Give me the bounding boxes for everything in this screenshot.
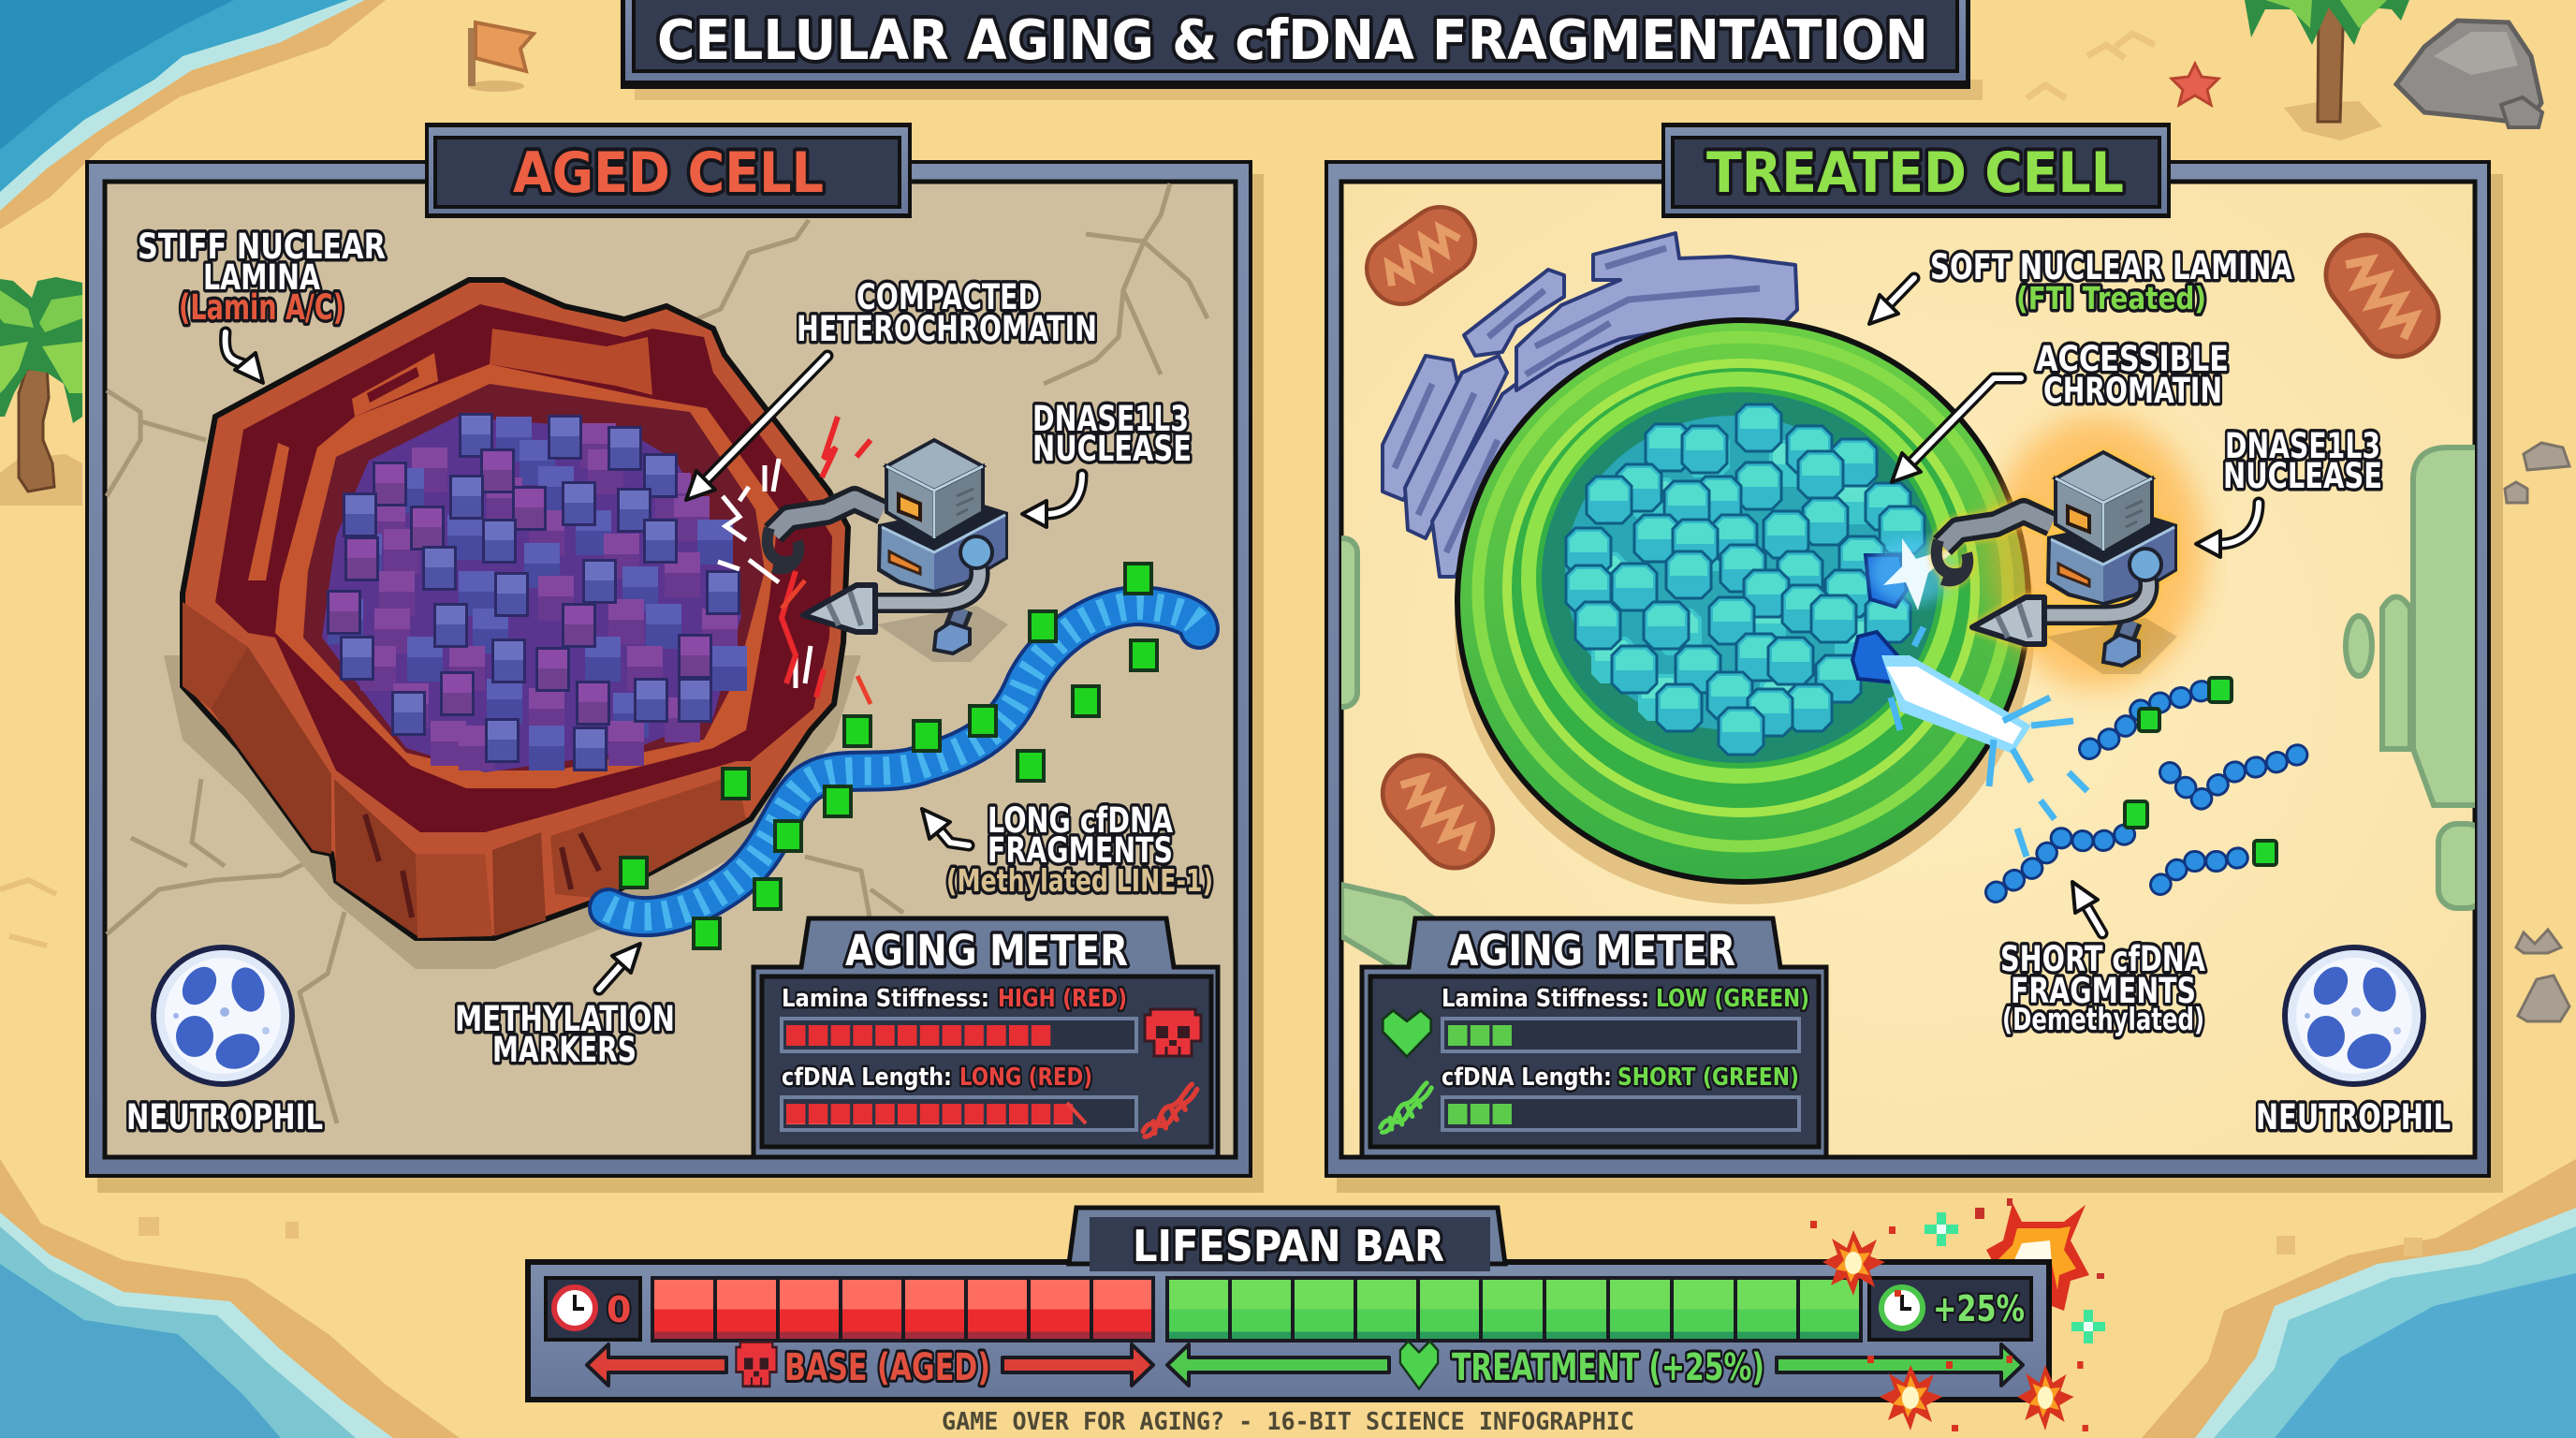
treated cell heading: TREATED CELL bbox=[1706, 140, 2124, 206]
label: methylation markers bbox=[455, 999, 675, 1070]
lamina stiffness label: Lamina Stiffness: bbox=[782, 985, 989, 1013]
label: methylation markers: MARKERS bbox=[492, 1030, 637, 1070]
treatment arrows bbox=[1167, 1344, 2023, 1386]
lamina stiffness bar bbox=[1442, 1019, 1799, 1051]
icon: left palm tree bbox=[0, 277, 82, 506]
label: DNASE1L3 nuclease aged bbox=[1032, 399, 1192, 469]
icon: rock pile bbox=[2396, 21, 2542, 127]
accessible chromatin blobs bbox=[1566, 404, 1925, 755]
label: stiff nuclear lamina: (Lamin A/C) bbox=[179, 287, 344, 328]
damage sparks bbox=[718, 417, 871, 704]
icon: skull bbox=[1145, 1009, 1201, 1056]
label: methylation markers: METHYLATION bbox=[455, 999, 675, 1039]
aged labels bbox=[126, 227, 1213, 1137]
icon: starfish bbox=[2172, 64, 2218, 105]
meter heading: AGING METER bbox=[1450, 926, 1735, 976]
label: long cfDNA fragments: (Methylated LINE-1) bbox=[946, 862, 1213, 899]
blue energy sparks bbox=[1869, 538, 2087, 857]
aged cell heading: AGED CELL bbox=[513, 140, 824, 206]
label: accessible chromatin bbox=[2036, 339, 2229, 411]
start clock box bbox=[546, 1278, 640, 1340]
footer caption: GAME OVER FOR AGING? - 16-BIT SCIENCE INFOGRAPHIC bbox=[942, 1408, 1634, 1436]
small rocks bbox=[2505, 443, 2569, 1021]
mitochondria bbox=[1354, 194, 2453, 883]
base red bar bbox=[652, 1278, 1153, 1341]
arrow: long cfDNA bbox=[922, 809, 969, 845]
label: soft nuclear lamina: SOFT NUCLEAR LAMINA bbox=[1930, 247, 2292, 287]
long cfDNA strand with methylation markers bbox=[608, 564, 1199, 948]
label: DNASE1L3 nuclease treated: NUCLEASE bbox=[2223, 456, 2382, 496]
robot: DNASE1L3 nuclease treated bbox=[1937, 452, 2177, 674]
treated labels bbox=[1869, 247, 2451, 1137]
label: DNASE1L3 nuclease aged: DNASE1L3 bbox=[1032, 399, 1189, 439]
label: DNASE1L3 nuclease aged: NUCLEASE bbox=[1032, 429, 1192, 469]
arrow: stiff lamina bbox=[226, 332, 263, 383]
arrow: methylation bbox=[599, 944, 640, 990]
icon: base skull bbox=[736, 1342, 777, 1387]
panel tab: aged cell bbox=[425, 123, 912, 218]
robot glow bbox=[1989, 417, 2204, 688]
panel tab: treated cell bbox=[1661, 123, 2171, 218]
end clock box bbox=[1869, 1278, 2031, 1340]
treated nucleus bbox=[1455, 320, 2035, 904]
lamina stiffness label bbox=[1442, 985, 1809, 1013]
arrow: soft lamina bbox=[1869, 278, 1914, 324]
cfDNA length bar bbox=[782, 1097, 1136, 1130]
big explosion behind lifespan panel bbox=[1975, 1198, 2104, 1311]
label: long cfDNA fragments: FRAGMENTS bbox=[988, 830, 1173, 871]
label: short cfDNA fragments: FRAGMENTS bbox=[2011, 971, 2196, 1011]
arrow: short cfDNA bbox=[2072, 882, 2102, 933]
base arrows bbox=[587, 1344, 1153, 1386]
compacted heterochromatin cubes bbox=[327, 413, 747, 771]
cacti background bbox=[1329, 448, 2490, 974]
label: neutrophil treated: NEUTROPHIL bbox=[2256, 1097, 2451, 1137]
label: compacted heterochromatin: HETEROCHROMATIN bbox=[797, 309, 1097, 349]
label: stiff nuclear lamina: STIFF NUCLEAR bbox=[138, 227, 386, 267]
label: soft nuclear lamina bbox=[1930, 247, 2292, 316]
label: DNASE1L3 nuclease treated bbox=[2223, 426, 2382, 496]
label: accessible chromatin: ACCESSIBLE bbox=[2036, 339, 2229, 379]
label: neutrophil aged: NEUTROPHIL bbox=[126, 1097, 323, 1137]
cfDNA length label: SHORT (GREEN) bbox=[1617, 1064, 1799, 1092]
panel: aged cell bbox=[85, 160, 1264, 1193]
panel: aging meter aged bbox=[754, 918, 1218, 1157]
cfDNA length label: cfDNA Length: bbox=[1442, 1064, 1612, 1092]
neutrophil aged bbox=[154, 947, 292, 1084]
icon: red DNA helix bbox=[1143, 1084, 1197, 1137]
label: stiff nuclear lamina: LAMINA bbox=[203, 257, 320, 298]
arrow: nuclease treated bbox=[2196, 503, 2259, 557]
label: DNASE1L3 nuclease treated: DNASE1L3 bbox=[2225, 426, 2380, 466]
cfDNA length bar bbox=[1442, 1097, 1799, 1130]
icon: right palm tree bbox=[2245, 0, 2409, 140]
treatment label: TREATMENT (+25%) bbox=[1452, 1346, 1764, 1389]
lamina stiffness label: LOW (GREEN) bbox=[1656, 985, 1809, 1013]
end clock box: +25% bbox=[1933, 1288, 2025, 1329]
label: short cfDNA fragments bbox=[2000, 939, 2205, 1037]
arrow: heterochromatin bbox=[686, 356, 827, 500]
lamina stiffness label: HIGH (RED) bbox=[998, 985, 1127, 1013]
icon: treatment heart bbox=[1400, 1342, 1438, 1388]
small explosions and sparkles bbox=[1810, 1212, 2105, 1431]
label: soft nuclear lamina: (FTI Treated) bbox=[2016, 280, 2206, 316]
title banner bbox=[621, 0, 1983, 100]
ground cracks bbox=[107, 183, 1208, 1123]
lamina stiffness label bbox=[782, 985, 1127, 1013]
soft lamina blue-gray folds bbox=[1383, 233, 1797, 577]
label: short cfDNA fragments: (Demethylated) bbox=[2002, 1001, 2204, 1037]
label: accessible chromatin: CHROMATIN bbox=[2043, 371, 2222, 411]
treatment green bar bbox=[1167, 1278, 1861, 1341]
label: compacted heterochromatin: COMPACTED bbox=[856, 277, 1040, 317]
label: stiff nuclear lamina bbox=[138, 227, 386, 328]
label: long cfDNA fragments: LONG cfDNA bbox=[988, 800, 1173, 841]
label: compacted heterochromatin bbox=[797, 277, 1097, 349]
panel: treated cell bbox=[1325, 160, 2503, 1193]
panel: lifespan bar bbox=[528, 1208, 2049, 1400]
short cfDNA fragments bbox=[1996, 678, 2301, 892]
cfDNA length label: cfDNA Length: bbox=[782, 1064, 952, 1092]
neutrophil treated bbox=[2285, 947, 2423, 1084]
cfDNA length label bbox=[782, 1064, 1092, 1092]
icon: flag bbox=[468, 22, 534, 92]
robot: DNASE1L3 nuclease aged bbox=[768, 440, 1008, 662]
start clock box: 0 bbox=[607, 1289, 631, 1330]
title text: CELLULAR AGING & cfDNA FRAGMENTATION bbox=[657, 7, 1928, 72]
lamina stiffness label: Lamina Stiffness: bbox=[1442, 985, 1649, 1013]
icon: green DNA helix bbox=[1381, 1083, 1431, 1133]
lifespan heading: LIFESPAN BAR bbox=[1133, 1221, 1444, 1271]
icon: green heart bbox=[1383, 1010, 1431, 1057]
lamina stiffness bar bbox=[782, 1019, 1136, 1051]
panel: aging meter treated bbox=[1362, 918, 1826, 1157]
arrow: accessible chromatin bbox=[1892, 378, 2021, 482]
meter heading: AGING METER bbox=[845, 926, 1128, 976]
arrow: nuclease aged bbox=[1022, 475, 1082, 527]
cfDNA length label bbox=[1442, 1064, 1799, 1092]
label: long cfDNA fragments bbox=[946, 800, 1213, 899]
cfDNA length label: LONG (RED) bbox=[959, 1064, 1092, 1092]
aged nucleus with stiff lamina bbox=[164, 280, 861, 969]
label: short cfDNA fragments: SHORT cfDNA bbox=[2000, 939, 2205, 979]
base label: BASE (AGED) bbox=[784, 1346, 990, 1389]
